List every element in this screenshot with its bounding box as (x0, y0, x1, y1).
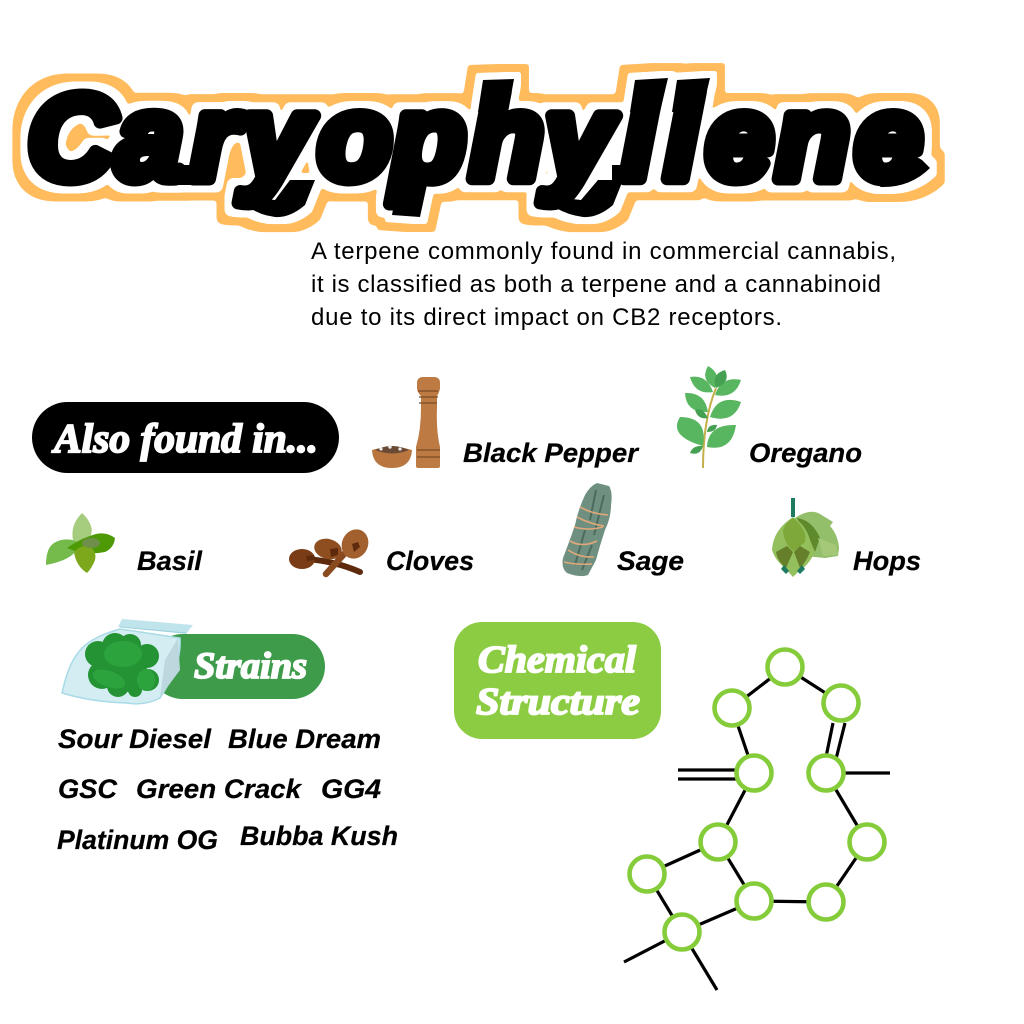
label: basil: Basil (137, 546, 202, 576)
icon: sage bundle (562, 483, 612, 576)
strain names: Bubba Kush (240, 821, 398, 851)
description text (311, 238, 896, 331)
heading: chemical structure (454, 622, 661, 739)
heading: strains (150, 634, 325, 699)
label: hops: Hops (853, 546, 921, 576)
label: black pepper: Black Pepper (463, 438, 640, 468)
icon: hops cone (772, 498, 839, 577)
heading: also found in (32, 402, 339, 473)
strain names: Green Crack (136, 774, 303, 804)
strain names: GSC (58, 774, 117, 804)
icon: oregano sprig (677, 366, 741, 468)
strain names (57, 724, 398, 855)
strain names: Sour Diesel (58, 724, 212, 754)
strain names: Blue Dream (228, 724, 381, 754)
icon: basil leaves (46, 513, 115, 573)
heading: also found in: Also found in... (51, 415, 318, 461)
heading: strains: Strains (194, 646, 307, 687)
chemical structure diagram (624, 650, 890, 990)
title: Caryophyllene (28, 71, 922, 205)
label: cloves: Cloves (386, 546, 474, 576)
label: oregano: Oregano (749, 438, 862, 468)
icon: pepper mill and bowl (372, 377, 440, 468)
heading: chemical structure: Chemical (478, 639, 636, 681)
icon: bag of cannabis (62, 619, 193, 704)
strain names: Platinum OG (57, 825, 218, 855)
icon: cloves (289, 525, 373, 574)
description text: due to its direct impact on CB2 receptors. (311, 304, 782, 331)
heading: chemical structure: Structure (476, 681, 640, 723)
description text: it is classified as both a terpene and a cannabinoid (311, 271, 881, 298)
strain names: GG4 (321, 774, 381, 804)
description text: A terpene commonly found in commercial cannabis, (311, 238, 896, 265)
label: sage: Sage (617, 546, 684, 576)
